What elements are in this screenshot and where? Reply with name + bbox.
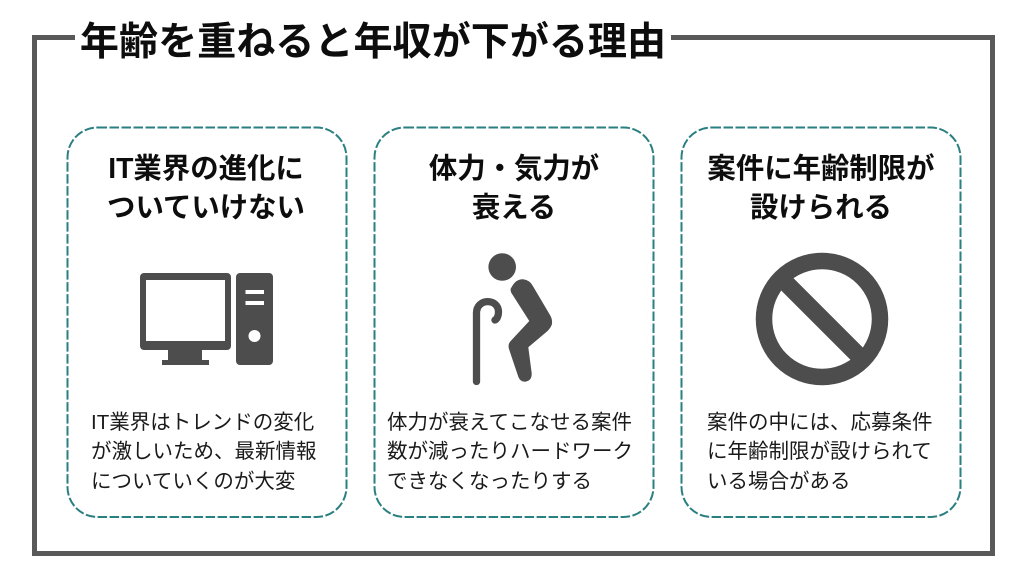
heading: age limit	[707, 152, 935, 224]
heading: age limit: 案件に年齢制限が	[707, 152, 935, 184]
body text: IT industry: IT業界はトレンドの変化	[91, 410, 314, 434]
body text: age limit	[707, 410, 932, 492]
title: 年齢を重ねると年収が下がる理由	[80, 21, 666, 64]
icon: desktop computer	[140, 273, 273, 365]
body text: IT industry: についていくのが大変	[91, 470, 295, 492]
panel: IT industry	[66, 126, 348, 518]
body text: stamina: できなくなったりする	[387, 470, 592, 492]
heading: stamina	[429, 152, 599, 224]
heading: stamina: 衰える	[472, 192, 556, 224]
heading: IT industry: IT業界の進化に	[108, 152, 304, 184]
body text: age limit: いる場合がある	[707, 470, 850, 492]
heading: IT industry: ついていけない	[107, 192, 305, 224]
body text: stamina: 数が減ったりハードワーク	[387, 440, 633, 463]
heading: IT industry	[107, 152, 305, 224]
body text: IT industry: が激しいため、最新情報	[91, 440, 316, 463]
body text: age limit: に年齢制限が設けられて	[707, 440, 932, 463]
body text: IT industry	[91, 410, 316, 492]
icon: prohibited sign	[756, 252, 888, 386]
icon: elderly person with cane	[472, 253, 552, 386]
panel: age limit	[680, 126, 962, 518]
body text: stamina: 体力が衰えてこなせる案件	[387, 410, 632, 434]
heading: age limit: 設けられる	[750, 192, 892, 224]
panel: stamina	[374, 126, 654, 518]
heading: stamina: 体力・気力が	[429, 152, 599, 184]
body text: age limit: 案件の中には、応募条件	[707, 410, 932, 434]
body text: stamina	[387, 410, 633, 492]
